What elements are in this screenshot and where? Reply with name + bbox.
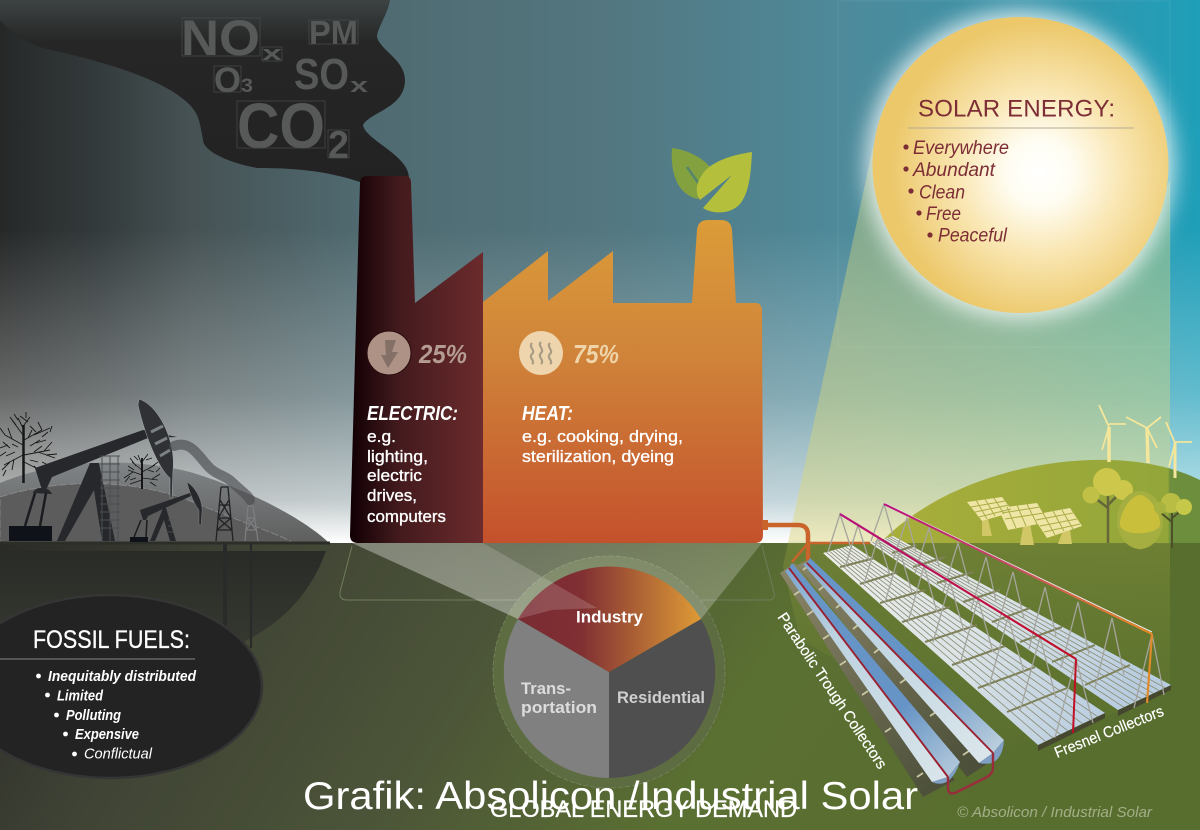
- smoke cloud with pollutants: [0, 0, 409, 190]
- pie slice: transportation: [504, 619, 609, 778]
- pollutant labels: PM: [309, 14, 358, 51]
- drill pipes: [225, 543, 251, 648]
- trough 1: [785, 563, 960, 784]
- dead tree small: [124, 454, 160, 489]
- dead tree left: [0, 412, 57, 483]
- tree group on hill: [1082, 468, 1192, 550]
- solar benefits list: Abundant: [912, 160, 996, 181]
- solar benefits list: Free: [926, 204, 961, 225]
- electric share: 25%: [418, 339, 467, 369]
- electric text: lighting,: [367, 447, 428, 466]
- solar benefits list: Clean: [919, 182, 965, 204]
- glow around sun: [866, 11, 1174, 319]
- pie chart: global energy demand: [493, 556, 725, 788]
- electric text: e.g.: [367, 427, 396, 446]
- heading: solar energy: SOLAR ENERGY:: [918, 96, 1115, 122]
- factory: heat section: [483, 220, 763, 543]
- solar panels on hill: [967, 497, 1082, 545]
- heat text: e.g. cooking, drying,: [522, 427, 683, 446]
- pollutant labels: x: [262, 43, 282, 65]
- solar benefits list: Everywhere: [913, 138, 1009, 159]
- factory: [350, 176, 763, 543]
- fresnel absorber rear: [884, 503, 1152, 703]
- pollutant labels: [181, 10, 368, 167]
- parabolic trough collectors: [780, 558, 1004, 797]
- fresnel row rear: [870, 536, 1171, 716]
- sun panel: solar energy: [872, 17, 1168, 313]
- pipe from factory to collectors: [763, 520, 870, 562]
- fresnel collectors: [823, 503, 1171, 751]
- icon: lightning: [367, 331, 411, 375]
- fresnel frames rear: [871, 504, 1164, 708]
- fresnel frames front: [828, 514, 1093, 738]
- pollutant labels: CO: [237, 90, 325, 162]
- solar benefits list: [903, 138, 1009, 246]
- trapezoid outline below factory: [340, 546, 774, 600]
- pump jack large: [9, 399, 177, 541]
- fossil fuels list: Limited: [57, 688, 104, 704]
- pie labels: Trans-: [521, 679, 571, 698]
- factory: electric section: [350, 176, 483, 543]
- label: fresnel collectors: Fresnel Collectors: [1052, 703, 1166, 762]
- electric text: drives,: [367, 486, 417, 505]
- icon: heat waves: [519, 331, 563, 375]
- wind turbines: [1099, 405, 1192, 478]
- electric text: electric: [367, 466, 422, 485]
- pie labels: Residential: [617, 688, 705, 707]
- solar benefits list: Peaceful: [938, 226, 1008, 246]
- pollutant labels: 3: [241, 76, 253, 97]
- fossil fuels panel: [0, 595, 262, 778]
- electric text: [367, 403, 458, 526]
- underground reservoir: [0, 551, 326, 680]
- electric text: computers: [367, 507, 446, 526]
- derrick smoke: [174, 445, 250, 500]
- heat text: [522, 403, 683, 466]
- pollutant labels: O: [214, 61, 241, 100]
- pollutant labels: NO: [181, 10, 260, 66]
- pollutant labels: 2: [328, 124, 349, 167]
- icon: leaves: [672, 148, 752, 212]
- pie labels: Industry: [576, 608, 644, 626]
- pie labels: portation: [521, 698, 597, 717]
- fresnel absorber front: [840, 514, 1076, 733]
- pump jack small: [130, 482, 202, 542]
- fossil fuels list: Polluting: [66, 708, 121, 724]
- pie slice: industry: [518, 567, 701, 672]
- oil derricks: [216, 487, 258, 541]
- pollutant labels: x: [350, 75, 368, 97]
- fossil fuels list: Inequitably distributed: [48, 669, 197, 685]
- heat text: sterilization, dyeing: [522, 447, 674, 466]
- electric text: ELECTRIC:: [367, 403, 458, 425]
- fossil fuels list: Conflictual: [84, 746, 153, 762]
- pie slice: residential: [609, 619, 715, 778]
- pie caption: global energy demand: GLOBAL ENERGY DEMAND: [490, 796, 797, 823]
- hill: green landscape: [880, 460, 1200, 543]
- cone from factory to pie: [352, 543, 762, 619]
- trough 2: [803, 558, 1004, 764]
- trough bases: [780, 563, 955, 797]
- pie labels: [521, 608, 705, 717]
- pollutant labels: SO: [294, 50, 349, 99]
- hill: grey fossil landscape: [0, 462, 328, 542]
- sky background: [0, 0, 1200, 543]
- heat share: 75%: [573, 339, 619, 369]
- heat text: HEAT:: [522, 403, 573, 425]
- copyright: © Absolicon / Industrial Solar: [957, 804, 1153, 821]
- label: parabolic trough collectors: Parabolic Trough Collectors: [774, 610, 890, 772]
- heading: fossil fuels: FOSSIL FUELS:: [33, 626, 190, 654]
- connecting pipe: [948, 753, 993, 793]
- fossil fuels list: Expensive: [75, 727, 139, 743]
- fresnel row front: [823, 545, 1105, 751]
- ground: [0, 543, 1200, 830]
- light beam from sun: [783, 147, 1170, 748]
- photo credit overlay: Grafik: Absolicon /Industrial Solar: [303, 775, 918, 818]
- fossil fuels list: [36, 669, 197, 762]
